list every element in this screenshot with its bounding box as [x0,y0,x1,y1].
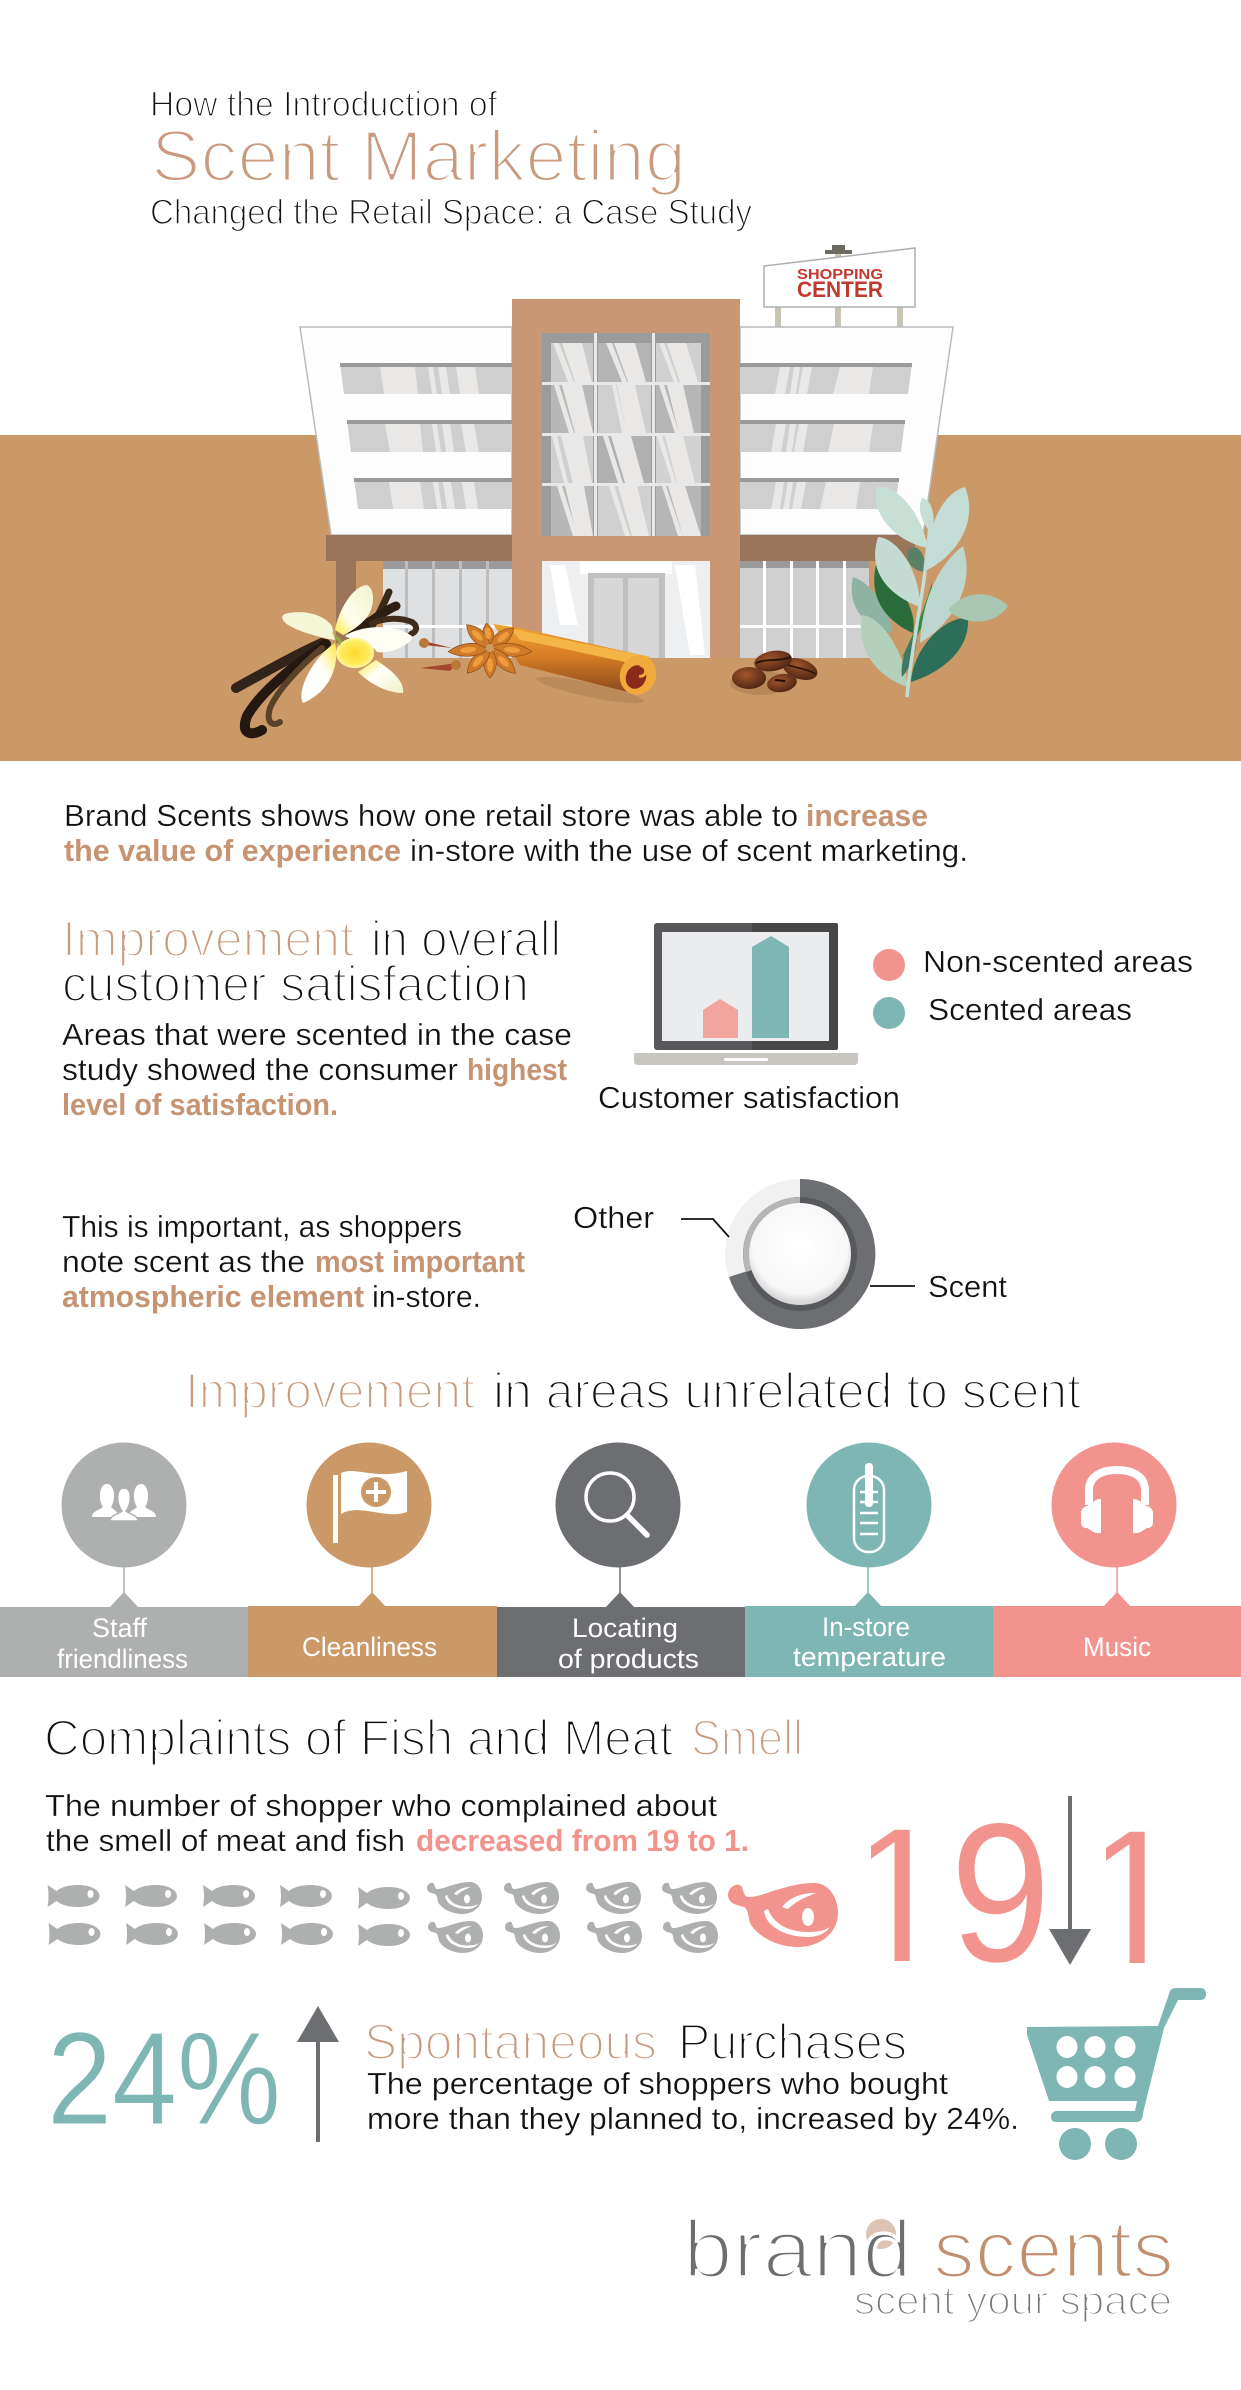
text: most important element: most important [315,1244,525,1279]
icon: thermometer [854,1463,884,1552]
heading: unrelated improvement: in areas unrelated to scent [493,1363,1081,1419]
entrance [542,561,710,658]
legend [873,944,1193,1029]
text: complaints description: The number of shopper who complained about [45,1788,717,1823]
ground floor windows [383,560,869,658]
donut label: scent: Scent [928,1269,1007,1304]
legend: Scented areas [928,992,1132,1027]
donut label: other: Other [573,1200,654,1235]
vanilla pods [236,592,416,733]
pillar [336,561,356,643]
illustration: cinnamon stick [493,624,662,708]
panel: in-store temperature: In-store [822,1612,910,1642]
sign: SHOPPING [797,266,883,283]
illustration: vanilla flower and pods [236,585,416,733]
icon: laptop bar chart [634,923,858,1065]
text: complaints description: the smell of meat and fish [46,1823,405,1858]
stat: 19 to 1: 9 [950,1782,1051,2003]
donut label: other [573,1200,729,1237]
panel: locating products: Locating [572,1613,678,1643]
text: scented areas satisfaction: level of satisfaction. [62,1087,338,1122]
panel: staff friendliness: friendliness [57,1644,188,1674]
arrow: up [297,2006,339,2142]
bar: scented [752,936,789,1038]
donut label: scent [870,1269,1007,1304]
intro text: the value of experience [64,833,401,868]
panel: locating products: of products [558,1644,699,1674]
intro text: increase [806,798,928,833]
text: purchases description: The percentage of shoppers who bought [367,2066,948,2101]
tower windows [542,333,710,536]
text: scented areas satisfaction: study showed the consumer [62,1052,458,1087]
illustration: star anise [448,620,532,678]
illustration: cloves [419,638,461,671]
panel: ground band [0,435,1241,761]
title line 1: How the Introduction of [150,85,497,124]
donut chart [725,1179,875,1329]
icon row: fish [48,1885,410,1946]
text: most important element: note scent as the [62,1244,305,1279]
panel: in-store temperature [745,1442,993,1677]
logo: scents [933,2204,1174,2295]
panel: music: Music [1083,1632,1151,1662]
stat: 19 to 1 [871,1796,1145,1965]
text: most important element [62,1209,525,1314]
right wing [740,327,953,535]
stat: 24 percent: 24% [47,2005,281,2152]
heading: overall customer satisfaction: customer satisfaction [62,956,529,1012]
icon: magnifier [586,1473,647,1535]
text: complaints description [45,1788,749,1858]
icon: large meat [728,1883,838,1947]
panel: cleanliness [248,1442,497,1677]
icon: headphones [1081,1470,1153,1533]
heading: overall customer satisfaction: Improvement [62,911,354,967]
text: most important element: This is important, as shoppers [62,1209,462,1244]
text: purchases description [367,2066,1019,2136]
wing windows [340,363,912,509]
text: scented areas satisfaction [62,1017,572,1122]
icon: flag [333,1471,407,1543]
panel: staff friendliness [0,1442,248,1677]
brown canopy band [326,535,915,561]
vanilla petals [282,585,413,703]
tagline: scent your space [854,2279,1172,2323]
bar: non-scented [703,999,738,1038]
icon row: meat [427,1882,718,1953]
stat: 19 to 1: 1 [838,1781,959,2023]
logo: brand [683,2204,912,2295]
intro text [64,798,968,868]
illustration: coffee beans [730,648,820,695]
heading: unrelated improvement [185,1363,1081,1419]
heading: spontaneous purchases: Purchases [678,2014,907,2070]
panel: locating products [497,1442,745,1677]
icon: people [92,1484,156,1521]
heading: overall customer satisfaction: in overall [371,911,561,967]
heading: complaints: Smell [691,1710,803,1766]
chart label: Customer satisfaction [598,1080,900,1115]
panel: cleanliness: Cleanliness [302,1632,437,1662]
title [150,85,752,232]
text: scented areas satisfaction: highest [467,1052,567,1087]
center tower [512,299,740,658]
heading: spontaneous purchases [364,2014,907,2070]
logo [683,2204,1174,2323]
text: most important element: in-store. [372,1279,481,1314]
arrow: down [1049,1796,1091,1965]
stat: 19 to 1: 1 [1073,1783,1194,2025]
icon: shopping cart [1027,1988,1206,2160]
text: scented areas satisfaction: Areas that were scented in the case [62,1017,572,1052]
heading: spontaneous purchases: Spontaneous [364,2014,657,2070]
left wing [300,327,512,535]
panel: staff friendliness: Staff [92,1613,147,1643]
illustration: green leaves [852,487,1008,697]
heading: unrelated improvement: Improvement [185,1363,475,1419]
sign [764,245,915,328]
text: most important element: atmospheric element [62,1279,364,1314]
panel: in-store temperature: temperature [793,1642,946,1672]
illustration: shopping center building [300,245,953,658]
sign: CENTER [797,277,883,302]
title line 3: Changed the Retail Space: a Case Study [150,193,752,232]
intro text: in-store with the use of scent marketing. [410,833,968,868]
title highlight: Scent Marketing [151,117,686,197]
text: complaints description: decreased from 19 to 1. [416,1823,749,1858]
panel: music [993,1442,1241,1677]
intro text: Brand Scents shows how one retail store was able to [64,798,798,833]
legend: Non-scented areas [923,944,1193,979]
text: purchases description: more than they planned to, increased by 24%. [367,2101,1019,2136]
heading: overall customer satisfaction [62,911,561,1012]
heading: complaints: Complaints of Fish and Meat [44,1710,673,1766]
